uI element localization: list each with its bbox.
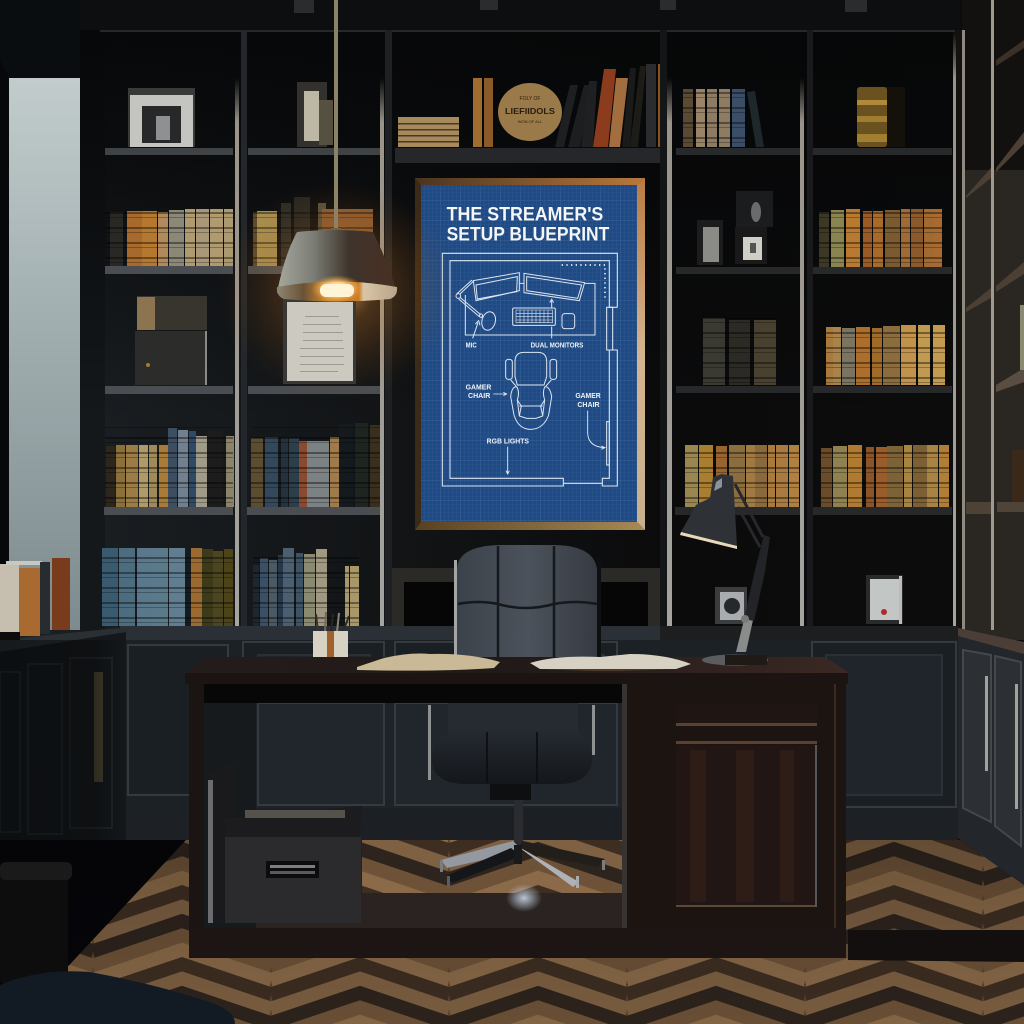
black apron xyxy=(202,684,627,703)
blueprint labels: RGB LIGHTS xyxy=(487,439,529,446)
books xyxy=(102,64,949,626)
red seal certificate frame xyxy=(866,575,903,624)
lower cabinets behind desk xyxy=(120,626,958,840)
cushion in foreground xyxy=(0,971,235,1024)
blueprint labels: GAMER xyxy=(466,384,491,391)
pendant lamp xyxy=(277,0,397,303)
gold cylinder xyxy=(857,87,905,147)
plaque xyxy=(498,83,562,141)
textured boxes xyxy=(135,296,207,385)
bookcase uprights xyxy=(235,30,963,630)
office chair back xyxy=(454,545,601,660)
left desk side xyxy=(189,684,204,928)
books: shelf 4 far left xyxy=(106,428,234,507)
blueprint labels: CHAIR xyxy=(468,393,490,400)
herringbone floor xyxy=(0,838,1024,1024)
books on desk xyxy=(357,654,691,671)
books: shelf 3 dark trio xyxy=(703,318,776,385)
pendant glow xyxy=(218,180,458,400)
poster title: SETUP BLUEPRINT xyxy=(447,225,610,246)
RGB light dots xyxy=(562,265,605,301)
books: top right xyxy=(683,89,764,147)
poster blue sheet xyxy=(421,185,637,522)
books: shelf 4 right-left bay xyxy=(685,445,799,507)
books: shelf 5 left xyxy=(102,548,233,626)
right pedestal xyxy=(622,684,846,928)
desk front edge xyxy=(185,673,848,684)
gamer chair plan xyxy=(506,352,557,429)
blueprint drawing xyxy=(442,205,617,486)
under-desk chair xyxy=(428,703,595,846)
small dark picture xyxy=(715,587,747,624)
dark framed keepsakes xyxy=(697,191,773,265)
plaque: LIEFIIDOLS xyxy=(505,106,555,116)
desk top xyxy=(185,657,848,684)
blueprint labels xyxy=(466,342,601,446)
niche under the poster xyxy=(392,568,660,628)
poster title: THE STREAMER'S xyxy=(447,205,603,226)
knee opening xyxy=(204,703,622,928)
stool in foreground xyxy=(0,862,72,986)
framed photo top left xyxy=(128,88,195,147)
poster frame xyxy=(415,178,645,530)
small frame with patterned book xyxy=(297,82,333,147)
blueprint labels: CHAIR xyxy=(577,402,600,409)
spine band overlay xyxy=(102,89,949,626)
left cabinet xyxy=(0,628,126,880)
books: shelf 2 left xyxy=(110,209,233,266)
room walls xyxy=(442,253,617,486)
blueprint labels: DUAL MONITORS xyxy=(531,342,584,349)
picture frames and objects on shelves xyxy=(128,82,905,624)
window panel on the left xyxy=(0,0,105,640)
desk xyxy=(185,654,848,958)
bookcase shading top xyxy=(80,0,960,420)
desk lamp xyxy=(680,474,770,666)
books: shelf 4 far right xyxy=(821,445,949,507)
top header rail xyxy=(80,0,960,32)
poster title xyxy=(447,205,610,246)
books on left cabinet xyxy=(0,558,70,640)
file box xyxy=(208,762,362,923)
leader arrows xyxy=(493,392,605,474)
framed sheet under pendant xyxy=(283,299,356,384)
desk plinth xyxy=(189,928,846,958)
books: shelf 4 middle xyxy=(251,423,380,507)
books: shelf 3 right xyxy=(826,325,945,385)
books: top centre stack xyxy=(398,64,666,147)
right cabinet xyxy=(958,628,1024,885)
blueprint labels: GAMER xyxy=(575,393,601,400)
right side wall shelves xyxy=(962,0,1024,640)
books: shelf 5 middle xyxy=(253,548,359,626)
plaque: FOLY OF xyxy=(520,96,540,102)
plaque: WON OF ALL xyxy=(518,119,543,124)
shelves xyxy=(104,148,952,515)
desk with monitors, keyboard and mic xyxy=(456,273,595,338)
books: shelf 2 middle xyxy=(253,197,373,266)
chair base xyxy=(440,841,605,888)
desk top items: pen cup xyxy=(313,612,349,667)
blueprint labels: MIC xyxy=(466,342,477,349)
poster: the streamer's setup blueprint xyxy=(415,178,645,530)
keyboard keys xyxy=(516,310,553,323)
books: shelf 2 right xyxy=(819,209,942,267)
